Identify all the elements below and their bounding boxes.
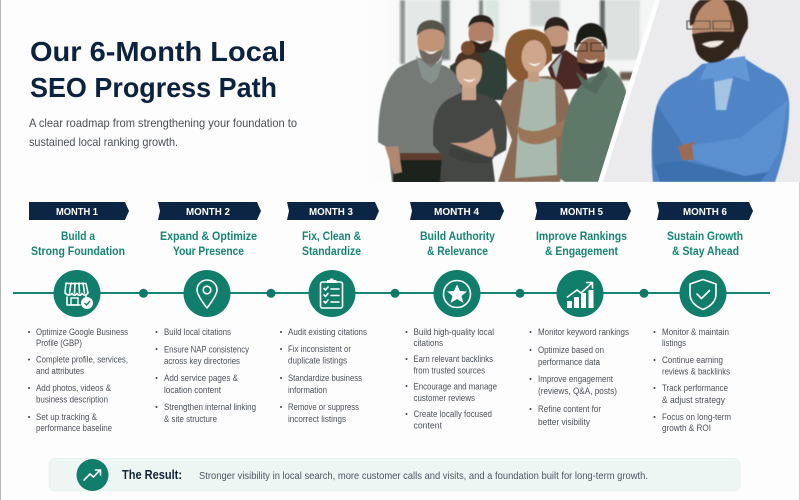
bullet: add photos	[28, 383, 111, 404]
bullet: optimize data: Optimize based on	[538, 345, 604, 355]
bullet: standardize info: Standardize business	[288, 373, 363, 383]
month banners	[29, 202, 753, 220]
bullet: remove listings: incorrect listings	[288, 414, 347, 424]
banner: month 1: MONTH 1	[56, 206, 98, 218]
bullet: internal linking: Strengthen internal linking	[164, 402, 256, 412]
bullet: remove listings: Remove or suppress	[288, 402, 360, 412]
banner: month 1	[29, 202, 129, 220]
bullet list: month 6	[654, 327, 731, 433]
bullet: backlinks: from trusted sources	[414, 366, 486, 376]
title	[30, 36, 286, 103]
heading: month 3: Standardize	[302, 246, 361, 258]
banner: month 6: MONTH 6	[683, 206, 727, 218]
bullet list: month 3	[280, 327, 368, 424]
bullet: optimize data	[530, 345, 604, 367]
bullet: internal linking: & site structure	[164, 414, 217, 424]
heading: month 5	[536, 231, 627, 258]
bullet: track performance: Track performance	[662, 383, 728, 393]
bullet: refine content: better visibility	[538, 417, 591, 427]
bullet: add photos: business description	[36, 394, 108, 404]
bullet: high-quality citations	[406, 327, 494, 348]
subtitle	[29, 116, 297, 149]
diagonal white divider	[598, 0, 659, 182]
heading: month 4: Build Authority	[420, 231, 496, 243]
bullet: complete profile	[28, 354, 128, 376]
bullet: customer reviews: customer reviews	[414, 393, 476, 403]
heading: month 2: Your Presence	[173, 246, 244, 258]
bullet: local content: Create locally focused	[414, 409, 492, 419]
heading: month 1: Build a	[61, 231, 96, 243]
bullet: NAP consistency: across key directories	[164, 356, 241, 366]
heading: month 6: & Stay Ahead	[672, 246, 739, 258]
icon: storefront with check	[54, 270, 100, 317]
result label: The Result:	[122, 467, 182, 482]
bullet: NAP consistency	[156, 344, 250, 366]
bullet: continue earning: reviews & backlinks	[662, 366, 731, 376]
back man	[450, 47, 507, 100]
banner: month 3	[287, 202, 379, 220]
back right man	[548, 50, 590, 90]
bullet: fix listings: Fix inconsistent or	[288, 344, 351, 354]
bullet: engagement	[530, 374, 617, 396]
title: SEO Progress Path	[30, 72, 277, 103]
bullet list: month 2	[156, 327, 256, 424]
bullet: internal linking	[156, 402, 256, 424]
bullet: service pages: location content	[164, 385, 222, 395]
heading: month 6	[667, 231, 743, 258]
icon: shield with check	[680, 270, 726, 317]
bullet: high-quality citations: citations	[414, 338, 444, 348]
bullet: complete profile: Complete profile, services,	[36, 354, 128, 364]
banner: month 2	[158, 202, 261, 220]
left man	[378, 58, 462, 182]
bullet: customer reviews	[406, 382, 497, 403]
bullet: standardize info	[280, 373, 363, 395]
banner: month 5: MONTH 5	[560, 206, 603, 218]
bullet: monitor listings: listings	[662, 338, 687, 348]
heading: month 1	[31, 231, 125, 258]
bullet: optimize GBP: Profile (GBP)	[36, 338, 82, 348]
icon: rising bar chart	[556, 270, 604, 317]
bullet: track performance	[654, 383, 728, 405]
icon: clipboard checklist	[308, 270, 356, 317]
bullet: engagement: Improve engagement	[538, 374, 613, 384]
bullet: long-term growth: growth & ROI	[662, 423, 711, 433]
bullet: optimize data: performance data	[538, 357, 600, 367]
bullet: local content: content	[414, 420, 443, 430]
bullet: complete profile: and attributes	[36, 366, 85, 376]
bullet: engagement: (reviews, Q&A, posts)	[538, 386, 617, 396]
bullet: fix listings: duplicate listings	[288, 356, 348, 366]
icon: star badge	[434, 270, 480, 317]
bullet: NAP consistency: Ensure NAP consistency	[164, 344, 250, 354]
bullet: service pages	[156, 373, 238, 395]
bullet: set up tracking	[28, 412, 112, 433]
heading: month 4: & Relevance	[427, 246, 488, 258]
bullet: long-term growth: Focus on long-term	[662, 412, 731, 422]
bullet: optimize GBP	[28, 327, 129, 348]
man with glasses	[559, 66, 628, 182]
banner: month 5	[535, 202, 631, 220]
bullet: refine content	[530, 404, 601, 427]
bullet: backlinks	[406, 354, 494, 376]
heading: month 6: Sustain Growth	[667, 231, 743, 243]
heading: month 4	[420, 231, 496, 258]
bullet list: month 1	[28, 327, 129, 433]
timeline	[13, 270, 770, 317]
bullet: customer reviews: Encourage and manage	[414, 382, 497, 392]
bullet: continue earning: Continue earning	[662, 355, 723, 365]
bullet: backlinks: Earn relevant backlinks	[414, 354, 494, 364]
heading: month 3: Fix, Clean &	[302, 231, 361, 243]
bullet: remove listings	[280, 402, 360, 424]
bullet: continue earning	[654, 355, 731, 376]
bullet: refine content: Refine content for	[538, 404, 601, 414]
timeline connector dots	[139, 289, 648, 298]
heading: month 2: Expand & Optimize	[160, 231, 257, 243]
icon: trending up arrow	[76, 459, 108, 491]
banner: month 3: MONTH 3	[309, 206, 353, 218]
photo: smiling man in blue shirt	[600, 0, 800, 182]
banner: month 6	[657, 202, 753, 220]
heading: month 3	[302, 231, 361, 258]
bullet: set up tracking: performance baseline	[36, 423, 112, 433]
bullet: track performance: & adjust strategy	[662, 395, 726, 405]
bullet: set up tracking: Set up tracking &	[36, 412, 97, 422]
bullet: local citations: Build local citations	[164, 327, 232, 337]
bullet: fix listings	[280, 344, 351, 366]
bullet: monitor listings: Monitor & maintain	[662, 327, 729, 337]
bullet: long-term growth	[654, 412, 731, 433]
heading: month 2	[160, 231, 257, 258]
subtitle: sustained local ranking growth.	[29, 135, 178, 149]
title: Our 6-Month Local	[30, 36, 286, 67]
subtitle: A clear roadmap from strengthening your foundation to	[29, 116, 297, 130]
woman in front	[433, 92, 507, 182]
month headings	[31, 231, 743, 258]
bullet: keyword rankings: Monitor keyword rankings	[538, 327, 630, 337]
bullet: optimize GBP: Optimize Google Business	[36, 327, 129, 337]
bullet: high-quality citations: Build high-quality local	[414, 327, 494, 337]
result statement: Stronger visibility in local search, more customer calls and visits, and a foundation built for long-term growth.	[199, 470, 648, 482]
bullet: service pages: Add service pages &	[164, 373, 238, 383]
banner: month 4: MONTH 4	[434, 206, 479, 218]
heading: month 5: Improve Rankings	[536, 231, 627, 243]
icon: map pin	[184, 270, 230, 317]
result banner	[49, 458, 740, 491]
heading: month 1: Strong Foundation	[31, 246, 125, 258]
bullet list: month 4	[406, 327, 497, 430]
bullet: audit citations: Audit existing citations	[288, 327, 368, 337]
bullet: local content	[406, 409, 492, 430]
bullet: standardize info: information	[288, 385, 327, 395]
banner: month 2: MONTH 2	[186, 206, 230, 218]
bullet: add photos: Add photos, videos &	[36, 383, 111, 393]
banner: month 4	[410, 202, 504, 220]
photo: team of six colleagues	[360, 0, 660, 183]
bullet: monitor listings	[654, 327, 729, 348]
bullet list: month 5	[530, 327, 630, 427]
curly woman	[498, 76, 570, 182]
heading: month 5: & Engagement	[545, 246, 618, 258]
